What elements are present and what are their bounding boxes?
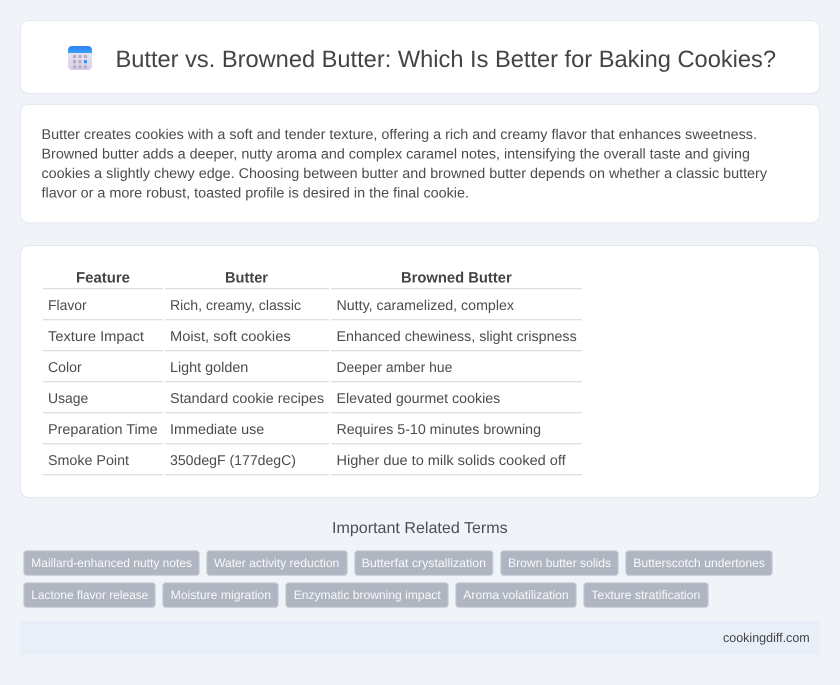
panel: comparison table <box>20 246 820 498</box>
tag <box>207 551 347 575</box>
tag <box>456 583 576 607</box>
tag <box>24 583 155 607</box>
table row: texture impact <box>48 329 577 345</box>
tag: Texture stratification <box>591 588 700 602</box>
title: Butter vs. Browned Butter: Which Is Better for Baking Cookies? <box>116 47 776 73</box>
icon: calendar <box>68 46 92 70</box>
tag: Lactone flavor release <box>31 588 149 602</box>
table row: smoke point: Higher due to milk solids cooked off <box>336 453 566 469</box>
tag: Brown butter solids <box>508 556 611 570</box>
tag <box>584 583 708 607</box>
tag <box>626 551 772 575</box>
tag: Enzymatic browning impact <box>294 588 441 602</box>
table row: usage <box>48 391 500 407</box>
table header row: Feature <box>76 269 130 286</box>
tag: Water activity reduction <box>214 556 339 570</box>
panel: introduction <box>20 104 820 223</box>
table row: preparation time: Preparation Time <box>48 422 158 438</box>
table row: texture impact: Enhanced chewiness, slight crispness <box>336 329 577 345</box>
table header row: Butter <box>225 269 268 286</box>
table row: preparation time: Immediate use <box>170 422 264 438</box>
table row: color: Light golden <box>170 360 248 376</box>
tag: Moisture migration <box>171 588 271 602</box>
table row: flavor: Flavor <box>48 298 87 314</box>
table header row <box>76 269 512 286</box>
table row: color <box>48 360 452 376</box>
table row: smoke point <box>48 453 566 469</box>
table row: usage: Usage <box>48 391 88 407</box>
panel: title header <box>20 20 820 94</box>
table row: texture impact: Texture Impact <box>48 329 144 345</box>
table row: texture impact: Moist, soft cookies <box>170 329 291 345</box>
table row: usage: Standard cookie recipes <box>170 391 324 407</box>
table row: preparation time: Requires 5-10 minutes browning <box>336 422 541 438</box>
text block: introduction paragraph <box>42 127 768 202</box>
text block: introduction paragraph: cookies a slightly chewy edge. Choosing between butter and browned butter depends on whether a classic buttery <box>42 166 768 182</box>
tag: Butterscotch undertones <box>633 556 765 570</box>
tag: Maillard-enhanced nutty notes <box>31 556 192 570</box>
footer <box>20 621 820 655</box>
tag <box>355 551 493 575</box>
table row: flavor: Nutty, caramelized, complex <box>336 298 514 314</box>
table row: preparation time <box>48 422 541 438</box>
tag <box>501 551 618 575</box>
text block: introduction paragraph: Browned butter adds a deeper, nutty aroma and complex caramel notes, intensifying the overall taste and giving <box>42 146 750 162</box>
table row: flavor <box>48 298 514 314</box>
tag <box>286 583 448 607</box>
heading: important related terms: Important Related Terms <box>332 520 508 537</box>
table row: color: Deeper amber hue <box>336 360 452 376</box>
text block: introduction paragraph: Butter creates cookies with a soft and tender texture, offering a rich and creamy flavor that enhances sweetness. <box>42 127 757 143</box>
tag <box>163 583 278 607</box>
table row: smoke point: 350degF (177degC) <box>170 453 296 469</box>
table row: color: Color <box>48 360 82 376</box>
tag group: related terms <box>24 551 772 607</box>
table header row: Browned Butter <box>401 269 512 286</box>
tag <box>24 551 199 575</box>
table row: smoke point: Smoke Point <box>48 453 129 469</box>
tag: Aroma volatilization <box>463 588 569 602</box>
text block: introduction paragraph: flavor or a more robust, toasted profile is desired in the final cookie. <box>42 186 469 202</box>
tag: Butterfat crystallization <box>362 556 486 570</box>
table row: flavor: Rich, creamy, classic <box>170 298 301 314</box>
table row: usage: Elevated gourmet cookies <box>336 391 500 407</box>
footer source text: cookingdiff.com <box>723 630 810 645</box>
